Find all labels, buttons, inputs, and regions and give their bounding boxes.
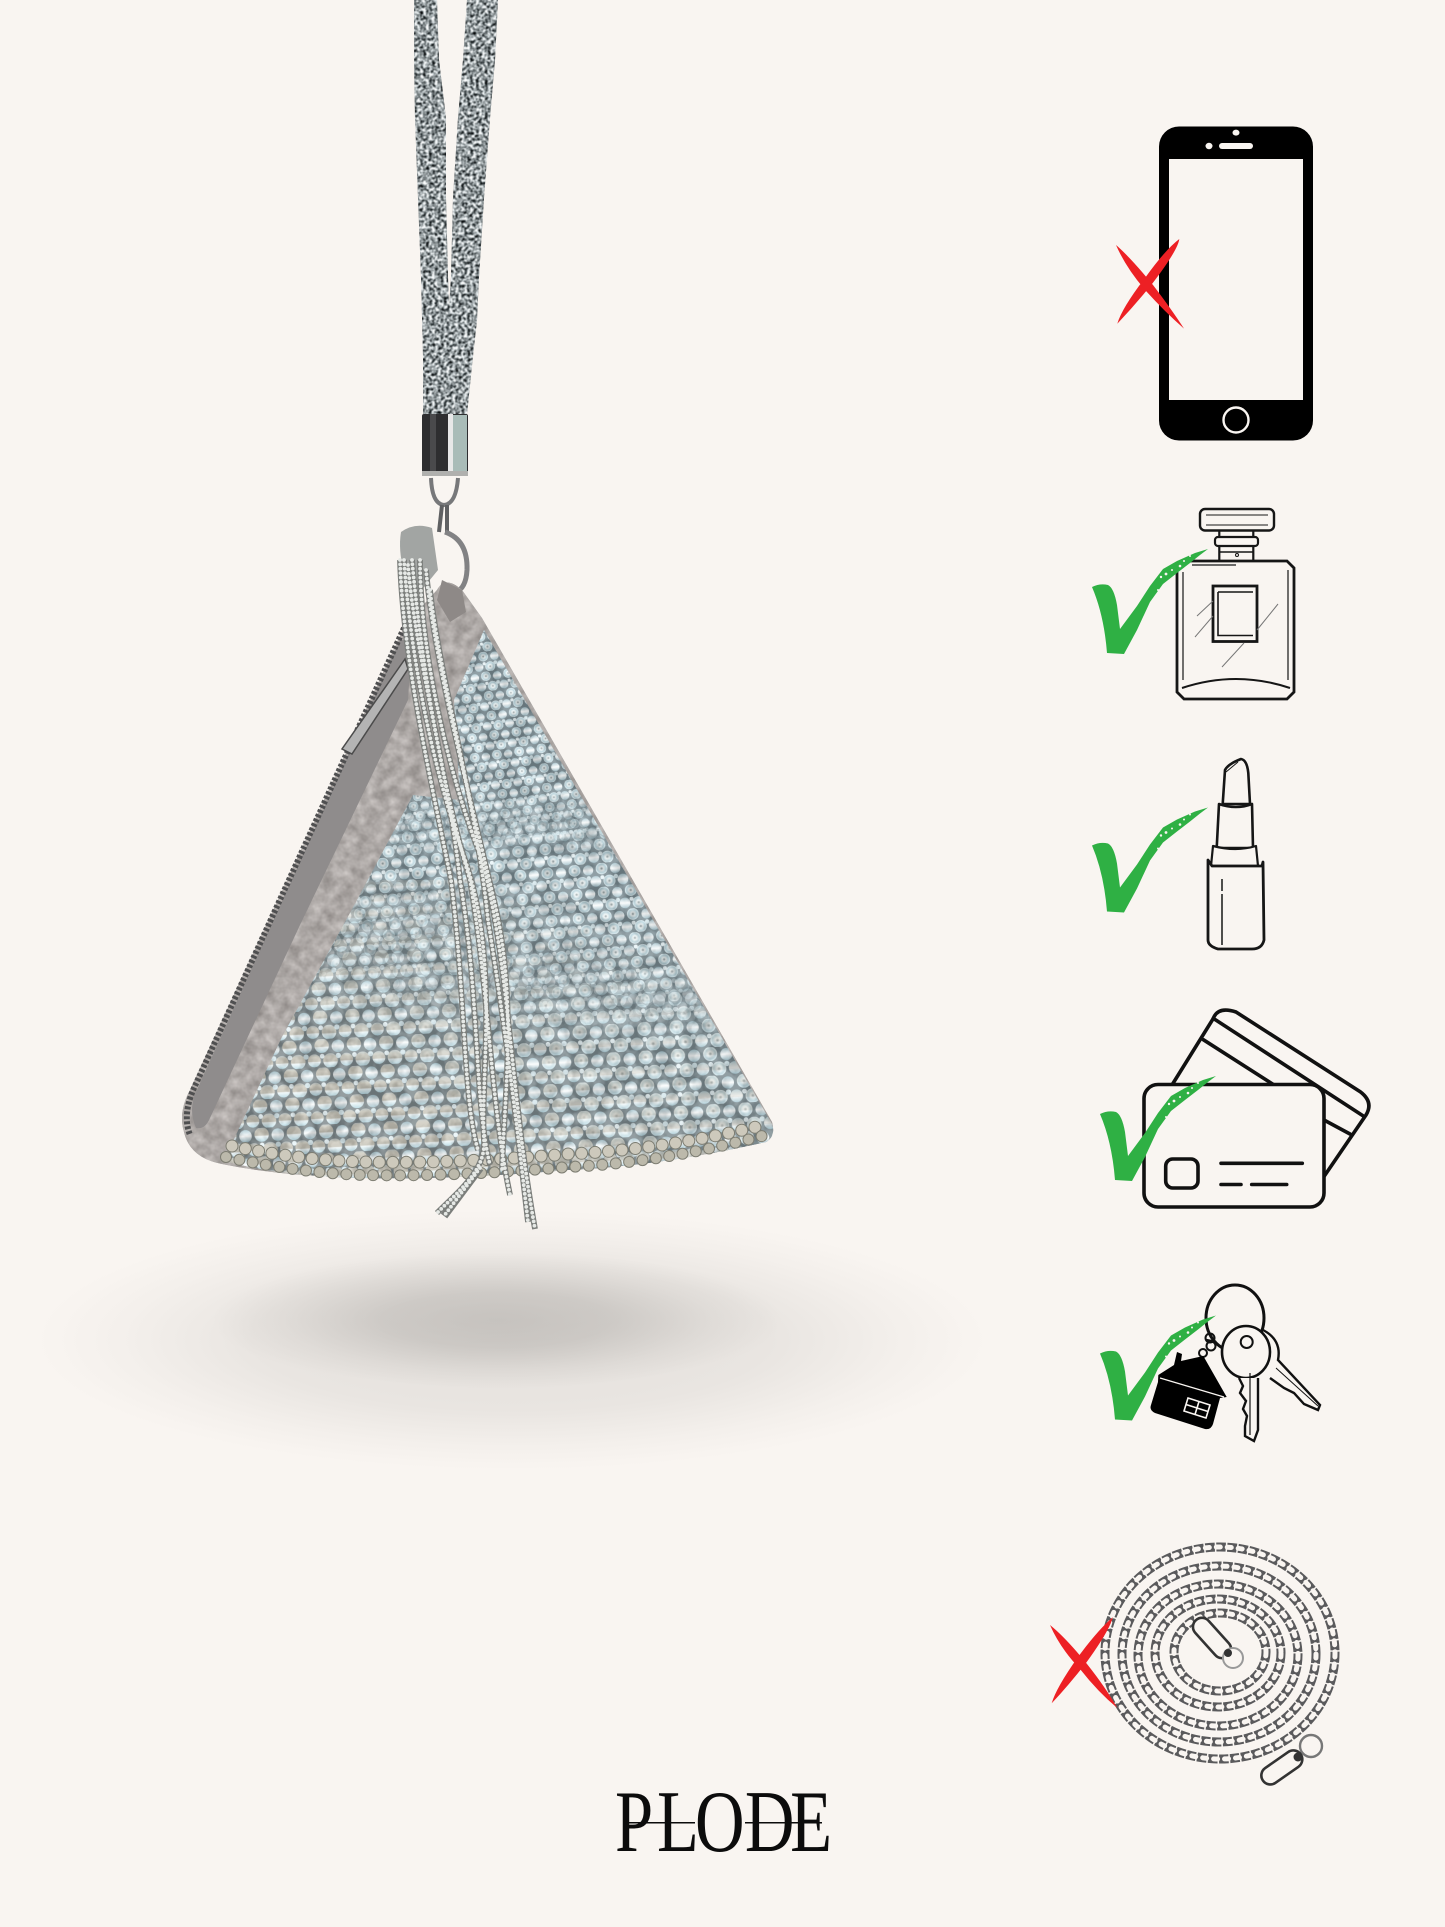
logo: PLODE: PLODE bbox=[615, 1774, 832, 1871]
house keyring bbox=[1150, 1352, 1227, 1429]
rhinestone field bbox=[230, 630, 774, 1178]
top suede tab bbox=[437, 580, 466, 622]
icon: perfume bottle with green check bbox=[1092, 509, 1294, 699]
inner clasp bbox=[1189, 1614, 1243, 1668]
lipstick bbox=[1208, 759, 1264, 949]
braided strap bbox=[414, 0, 498, 414]
beaded tassel bbox=[400, 526, 535, 1229]
crystal pyramid bag with strap bbox=[180, 0, 800, 1229]
zipper pull bbox=[342, 659, 408, 754]
zipper tape bbox=[192, 640, 412, 1128]
metal hook ring bbox=[431, 478, 467, 592]
metal ferrule bbox=[422, 414, 468, 476]
green check bbox=[1100, 1076, 1216, 1181]
credit cards bbox=[1144, 1010, 1369, 1207]
bag suede body bbox=[182, 582, 773, 1178]
bottom rows of beige stones bbox=[226, 1126, 766, 1175]
icon: phone with red cross bbox=[1116, 126, 1313, 440]
icon: lipstick with green check bbox=[1092, 759, 1264, 949]
red cross bbox=[1116, 239, 1184, 329]
red cross bbox=[1050, 1617, 1117, 1708]
icon: credit cards with green check bbox=[1100, 1010, 1369, 1207]
green check bbox=[1092, 808, 1208, 912]
green check bbox=[1100, 1316, 1216, 1420]
keys bbox=[1199, 1285, 1320, 1441]
coiled chain bbox=[1105, 1547, 1335, 1759]
drop shadow beneath bag bbox=[37, 1210, 987, 1470]
icon: house keys with green check bbox=[1100, 1285, 1320, 1441]
outer clasp bbox=[1258, 1735, 1322, 1788]
perfume bottle bbox=[1177, 509, 1294, 699]
icon: chain strap with red cross bbox=[1050, 1547, 1335, 1788]
green check bbox=[1092, 549, 1208, 654]
zipper teeth bbox=[187, 628, 404, 1135]
phone bbox=[1159, 126, 1313, 440]
